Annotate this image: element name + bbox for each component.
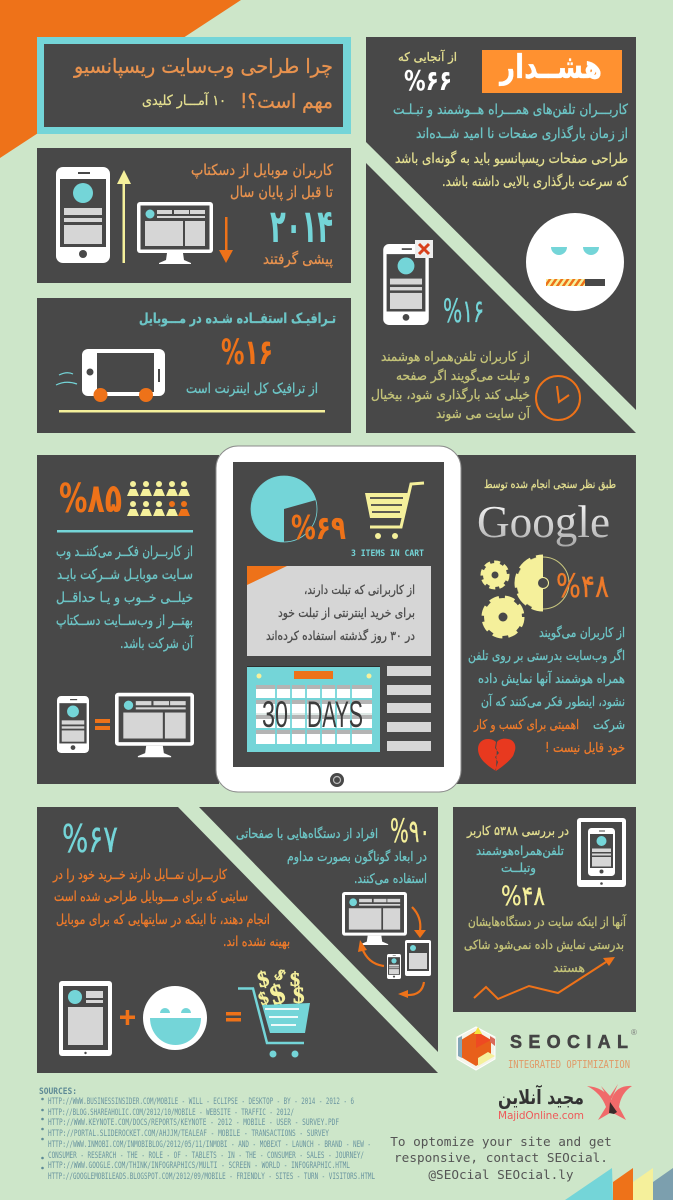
subheading: ۱۰ آمـــار کلیدی [142, 92, 226, 109]
corner triangle: orange [0, 0, 241, 158]
text block [52, 867, 290, 950]
icon: cart with dollars: $ [271, 966, 288, 984]
text block: کاربـــران تلفن‌های همـــراه هــوشمند و تبـلـت [393, 102, 628, 118]
text block: آن سایت می شوند [436, 405, 531, 422]
registered mark: ® [631, 1028, 637, 1037]
text card [247, 566, 431, 656]
text: از ترافیک کل اینترنت است [186, 381, 318, 397]
icon: shopping cart [365, 483, 424, 539]
plus sign [120, 1010, 135, 1025]
icon: clock [536, 376, 580, 420]
wordmark: SEOCIAL [510, 1032, 628, 1052]
calendar: 30 days [247, 666, 380, 752]
text block: طراحی صفحات ریسپانسیو باید به گونه‌ای باشد [395, 150, 628, 167]
tagline: INTEGRATED OPTIMIZATION [508, 1058, 630, 1071]
text block [56, 544, 194, 652]
icon: cart with dollars [238, 965, 310, 1058]
text: کاربران موبایل از دسکتاپ [191, 161, 334, 179]
arrow up [117, 170, 131, 263]
panel: Google survey [455, 455, 636, 784]
home button [330, 773, 344, 787]
sources list: HTTP://WWW.KEYNOTE.COM/DOCS/REPORTS/KEYNOTE - 2012 - MOBILE - USER - SURVEY.PDF [48, 1118, 339, 1128]
panel: warning [366, 37, 636, 433]
list bars [387, 666, 431, 751]
sources list: CONSUMER - RESEARCH - THE - ROLE - OF - TABLETS - IN - THE - CONSUMER - SALES - JOURNEY/ [48, 1151, 364, 1161]
icon: sleepy face [526, 213, 624, 311]
icon: cart with dollars: $ [290, 969, 300, 991]
contact text: responsive, contact SEOcial. [394, 1150, 608, 1165]
text block: اهمیتی برای کسب و کار [473, 718, 579, 733]
icon: phone with error [383, 240, 433, 325]
text block: وتبلــت [501, 860, 536, 876]
icon: cart with dollars: $ [255, 965, 272, 992]
stat 67%: %۶۷ [62, 817, 118, 861]
diagonal band [178, 807, 438, 1073]
panel: 67 and 90 percent [37, 807, 438, 1073]
text block: هستند [553, 960, 585, 975]
icon: cart with dollars: $ [266, 978, 289, 1012]
text block: آن شرکت باشد. [120, 635, 194, 652]
panel: mobile traffic [37, 298, 351, 433]
logo: Google: Google [477, 497, 610, 547]
caption: 3 ITEMS IN CART [351, 549, 425, 559]
text block: در بررسی ۵۳۸۸ کاربر [466, 823, 569, 839]
text card: در ۳۰ روز گذشته استفاده کرده‌اند [266, 628, 415, 644]
badge: warning: هشــدار [498, 47, 602, 86]
stat 48%: %۴۸ [556, 567, 609, 605]
contact text: To optomize your site and get [390, 1134, 612, 1149]
text card: برای خرید اینترنتی از تبلت خود [278, 605, 415, 621]
text block: از زمان بارگذاری صفحات نا امید شــده‌اند [416, 125, 628, 142]
sources list: HTTP://WWW.BUSINESSINSIDER.COM/MOBILE - WILL - ECLIPSE - DESKTOP - BY - 2014 - 2012 - 6 [48, 1097, 354, 1107]
text block [393, 102, 628, 190]
text block: سـایت موبایـل شــرکت بایـد [57, 567, 193, 583]
panel: mobile vs desktop: پیشی گرفتند [263, 250, 333, 269]
heading line 2: مهم است؟! [240, 89, 333, 113]
text block: بدرستی نمایش داده نمی‌شود شاکی [464, 937, 624, 953]
icon: phone on wheels [56, 349, 165, 402]
text block: استفاده می‌کنند. [354, 872, 427, 887]
sources list: HTTP://GOOGLEMOBILEADS.BLOGSPOT.COM/2012/09/MOBILE - FRIENDLY - SITES - TURN - VISITORS.HTML [48, 1172, 375, 1182]
panel: title [37, 37, 351, 134]
panel: mobile vs desktop: تا قبل از پایان سال [230, 183, 333, 202]
stat 69%: %۶۹ [291, 508, 346, 547]
text block: در ابعاد گوناگون بصورت مداوم [287, 849, 427, 865]
corner stripes [565, 1168, 673, 1200]
sources list: HTTP://PORTAL.SLIDEROCKET.COM/AHJJM/TEALEAF - MOBILE - TRANSACTIONS - SURVEY [48, 1129, 329, 1139]
panel: 85 percent [37, 455, 219, 784]
text block: خود قایل نیست ! [545, 741, 625, 756]
panel: mobile vs desktop [37, 148, 351, 283]
sources list [39, 1087, 375, 1182]
arrow down [219, 217, 233, 263]
contact text [390, 1134, 612, 1182]
text block: از کاربــران فکــر می‌کننــد وب [56, 544, 193, 560]
icon: broken heart [478, 739, 515, 771]
people pictogram [127, 481, 190, 516]
label: 30 days: DAYS [307, 694, 363, 735]
text block: از کاربران تلفن‌همراه هوشمند [381, 350, 530, 365]
text block: آنها از اینکه سایت در دستگاه‌هایشان [468, 914, 626, 930]
wordmark Latin: MajidOnline.com [498, 1110, 584, 1122]
stat 90%: %۹۰ [390, 812, 430, 850]
contact text: @SEOcial SEOcial.ly [428, 1167, 574, 1182]
logo: MajidOnline [498, 1084, 632, 1122]
tablet frame [216, 446, 461, 792]
icon: tablet [59, 981, 112, 1056]
logo mark [587, 1084, 632, 1120]
text block: خیلــی خــوب و یـا حداقــل [56, 590, 193, 606]
text block: افراد از دستگاه‌هایی با صفحاتی [236, 826, 378, 842]
heading: تـرافیـک استفــاده شـده در مـــوبایل [139, 311, 336, 327]
icon: desktop [137, 202, 213, 264]
label: 30 days [262, 694, 363, 735]
icon: device cycle [342, 892, 431, 998]
stat 16%: %۱۶ [443, 292, 484, 330]
text block: اگر وب‌سایت بدرستی بر روی تلفن [468, 648, 625, 664]
text block: بهینه نشده اند. [223, 934, 290, 950]
sources list: HTTP://BLOG.SHAREAHOLIC.COM/2012/10/MOBILE - WEBSITE - TRAFFIC - 2012/ [48, 1108, 294, 1118]
heading line 1: چرا طراحی وب‌سایت ریسپانسیو [73, 54, 333, 79]
text block: انجام دهند، تا اینکه در سایتهایی که برای موبایل [56, 912, 270, 928]
equals sign [226, 1012, 241, 1022]
logo: SEOcial [457, 1027, 637, 1071]
stat 66%: %۶۶ [404, 64, 452, 97]
text block: و تبلت می‌گویند اگر صفحه [396, 368, 530, 384]
text block [466, 823, 569, 876]
panel: survey of 5388 users [453, 807, 636, 1012]
intro text: طبق نظر سنجی انجام شده توسط [484, 478, 616, 492]
wordmark Persian: مجید آنلاین [498, 1084, 584, 1109]
text block: همراه هوشمند آنها نمایش داده [478, 670, 625, 687]
text block [236, 826, 427, 887]
icon: smiling face [143, 986, 207, 1050]
line chart arrow [474, 957, 615, 999]
icon: cart with dollars: $ [293, 983, 304, 1008]
stat 48%: %۴۸ [501, 881, 545, 912]
logo mark hexagon [457, 1027, 495, 1070]
text block [468, 625, 625, 756]
stat 16%: %۱۶ [221, 333, 273, 373]
stat 66% [398, 49, 457, 97]
text block: از کاربران می‌گویند [539, 625, 625, 641]
pie chart [251, 476, 317, 542]
icon: cart with dollars: $ [255, 987, 272, 1009]
text block: نشود، اینطور فکر می‌کنند که آن [481, 693, 625, 710]
text block: سایتی که برای مـــوبایل طراحی شده است [54, 889, 248, 905]
stat 85%: %۸۵ [59, 476, 122, 522]
text block [371, 350, 531, 422]
stat 66%: از آنجایی که [398, 49, 457, 65]
icon: phone equals desktop [57, 693, 194, 757]
text block: خیلی کند بارگذاری شود، بیخیال [371, 387, 530, 403]
label: 30 days: 30 [262, 694, 288, 735]
sources list: HTTP://WWW.GOOGLE.COM/THINK/INFOGRAPHICS/MULTI - SCREEN - WORLD - INFOGRAPHIC.HTML [48, 1161, 350, 1171]
text block: بهتــر از وب‌ســایت دســکتاپ [56, 613, 193, 629]
text block [464, 914, 626, 975]
icon: tablet and phone [577, 818, 626, 887]
text card: از کاربرانی که تبلت دارند، [304, 582, 415, 598]
diagonal band [366, 142, 636, 433]
number 2014: ۲۰۱۴ [270, 199, 333, 253]
icon: phone [56, 167, 110, 263]
sources list: SOURCES: [39, 1087, 77, 1097]
text block: شرکت [593, 718, 625, 733]
text block: که سرعت بارگذاری بالایی داشته باشد. [442, 173, 628, 190]
text block: کاربــران تمــایل دارند خــرید خود را در [52, 867, 227, 883]
icon: gears [482, 556, 570, 637]
text block: تلفن‌همراه‌هوشمند [476, 843, 564, 859]
sources list: HTTP://WWW.INMOBI.COM/INMOBIBLOG/2012/05/11/INMOBI - AND - MOBEXT - LAUNCH - BRAND - NEW - [48, 1140, 371, 1150]
